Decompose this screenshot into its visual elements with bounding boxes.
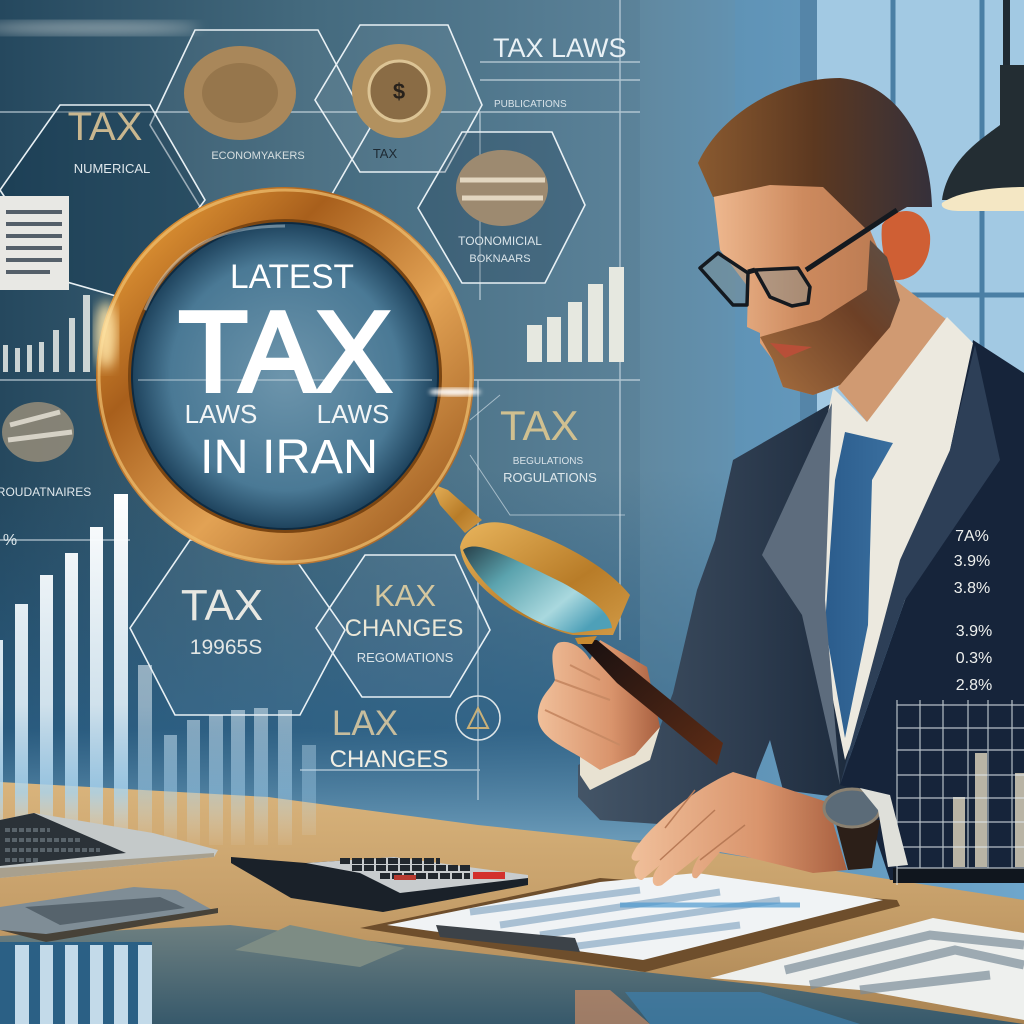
hexagon: changes: CHANGES	[345, 615, 463, 642]
hexagon: technical stack: BOKNAARS	[469, 253, 531, 265]
suit data overlay: 2.8%	[956, 677, 992, 694]
small magnifier	[460, 522, 630, 644]
shirt cuff	[860, 788, 908, 867]
lax changes label: LAX	[332, 704, 398, 743]
suit data overlay: 3.9%	[954, 553, 990, 570]
laptop	[0, 813, 218, 878]
hexagon: top coin	[150, 30, 370, 215]
shirt collar and front	[810, 317, 973, 760]
hexagon: tax: 19965S	[190, 636, 262, 659]
right lapel	[840, 345, 1000, 785]
tax regulations block	[470, 395, 625, 515]
tie	[825, 432, 893, 738]
lens text: LATEST	[230, 258, 354, 296]
right small bar chart	[527, 267, 624, 362]
hexagon: changes: REGOMATIONS	[357, 650, 454, 665]
papers on desk left	[0, 887, 218, 942]
hexagon: numerical: TAX	[68, 105, 142, 149]
glasses temple	[748, 210, 897, 272]
large magnifying glass: IN IRAN	[200, 431, 378, 484]
left mini icon and caption: %	[3, 532, 17, 549]
magnifier handle	[430, 483, 723, 765]
calculator	[231, 857, 528, 912]
tax regulations block: ROGULATIONS	[503, 470, 597, 485]
lax changes label: CHANGES	[330, 746, 448, 773]
hexagon: dollar coin	[315, 25, 482, 172]
hexagon: technical stack	[418, 132, 585, 283]
ear	[882, 211, 930, 280]
hexagon: technical stack: TOONOMICIAL	[458, 234, 542, 248]
heading: tax laws: TAX LAWS	[493, 33, 627, 63]
hexagon: dollar coin: TAX	[373, 146, 397, 161]
neck	[838, 280, 965, 422]
lips	[770, 343, 812, 358]
hexagon: numerical	[0, 105, 205, 300]
clipboard with document	[360, 873, 900, 972]
large magnifying glass: TAX	[178, 289, 392, 416]
lax changes label	[330, 696, 500, 773]
beard	[760, 240, 900, 395]
document thumbnail	[0, 196, 69, 290]
suit data overlay: 7A%	[955, 528, 989, 545]
suit data overlay: 3.8%	[954, 580, 990, 597]
man	[578, 78, 1024, 880]
face	[713, 165, 893, 395]
hexagon: top coin: ECONOMYAKERS	[211, 150, 305, 162]
hexagon: dollar coin: $	[393, 79, 405, 104]
hexagon: changes: KAX	[374, 578, 436, 613]
desk	[0, 782, 1024, 1024]
hand holding magnifier	[538, 640, 660, 770]
hexagon: tax	[130, 540, 345, 715]
large magnifying glass: LAWS	[317, 399, 389, 429]
lower hand	[632, 772, 847, 886]
document right	[710, 918, 1024, 1020]
large bar chart	[0, 494, 316, 845]
hexagon: numerical: NUMERICAL	[74, 161, 150, 176]
left mini icon and caption	[0, 402, 91, 549]
suit torso and left sleeve	[578, 403, 860, 830]
suit data overlay: 0.3%	[956, 650, 992, 667]
glasses	[700, 253, 810, 306]
large magnifying glass: LAWS	[185, 399, 257, 429]
large magnifying glass	[95, 190, 481, 562]
tax regulations block: TAX	[500, 402, 579, 449]
hexagon: changes	[316, 555, 490, 697]
glass panel lines	[0, 0, 640, 800]
suit data overlay	[893, 528, 1024, 885]
small caption: PUBLICATIONS	[494, 99, 567, 110]
hexagon: tax: TAX	[181, 581, 263, 630]
desk reflection bars	[15, 945, 152, 1024]
suit right side	[840, 340, 1024, 880]
suit data overlay: 3.9%	[956, 623, 992, 640]
pendant lamp	[942, 0, 1024, 211]
hair	[698, 78, 932, 230]
left lapel	[762, 403, 840, 785]
left small bars	[3, 295, 90, 372]
wrist watch	[824, 789, 880, 870]
upper sleeve cuff	[580, 727, 660, 790]
tax regulations block: BEGULATIONS	[513, 456, 584, 467]
